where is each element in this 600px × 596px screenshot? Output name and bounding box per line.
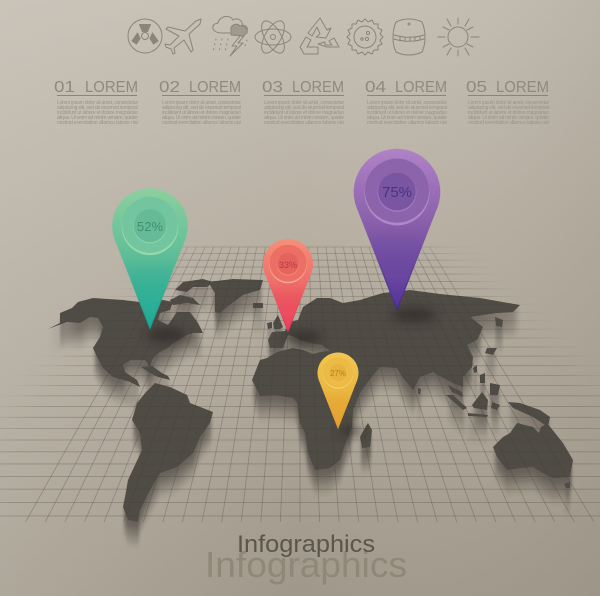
column 01: aliqua. Ut enim ad minim veniam, quister [57, 115, 138, 121]
column 02: incididunt ut labore et dolore magnaduo [162, 110, 241, 116]
column 04: 04 [365, 79, 386, 96]
pin: purple 75% [354, 149, 440, 311]
column 02: LOREM [189, 79, 241, 96]
pin: green 52%: 52% [137, 219, 163, 234]
pin: green 52% [112, 188, 188, 330]
column 04: adipiscing elit, sed do eiusmod temporal [367, 105, 447, 111]
column 05: LOREM [496, 79, 549, 96]
text columns [54, 79, 549, 126]
column 05: incididunt ut labore et dolore magnaduo [468, 110, 549, 116]
column 03: nostrud exercitation ullamco laboris nisi [264, 120, 344, 126]
column 04: LOREM [395, 79, 447, 96]
column 05: aliqua. Ut enim ad minim veniam, quister [468, 115, 549, 121]
column 05: adipiscing elit, sed do eiusmod temporal [468, 105, 549, 111]
column 02: Lorem ipsum dolor sit amet, consectetur [162, 100, 241, 106]
column 02: nostrud exercitation ullamco laboris nisi [162, 120, 241, 126]
column 01: LOREM [85, 79, 138, 96]
icon: airplane [165, 19, 201, 54]
column 03: aliqua. Ut enim ad minim veniam, quister [264, 115, 344, 121]
column 01: Lorem ipsum dolor sit amet, consectetur [57, 100, 138, 106]
title: Infographics [237, 531, 375, 558]
column 05: nostrud exercitation ullamco laboris nisi [468, 120, 549, 126]
column 01: nostrud exercitation ullamco laboris nisi [57, 120, 138, 126]
pin: red 33% [263, 239, 313, 333]
world map [0, 247, 600, 549]
column 03: Lorem ipsum dolor sit amet, consectetur [264, 100, 344, 106]
column 03: 03 [262, 79, 283, 96]
column 01 [54, 79, 138, 126]
land masses [48, 279, 573, 522]
column 05: 05 [466, 79, 487, 96]
column 04: aliqua. Ut enim ad minim veniam, quister [367, 115, 447, 121]
icon row [128, 16, 479, 57]
pin: purple 75%: 75% [382, 184, 412, 201]
column 05: Lorem ipsum dolor sit amet, consectetur [468, 100, 549, 106]
column 02: aliqua. Ut enim ad minim veniam, quister [162, 115, 241, 121]
column 04: Lorem ipsum dolor sit amet, consectetur [367, 100, 447, 106]
column 04 [365, 79, 447, 126]
column 05 [466, 79, 549, 126]
icon: barrel [393, 19, 425, 55]
column 01: 01 [54, 79, 75, 96]
column 01: incididunt ut labore et dolore magnaduo [57, 110, 138, 116]
icon: atom [255, 17, 291, 57]
column 04: nostrud exercitation ullamco laboris nisi [367, 120, 447, 126]
column 03 [262, 79, 344, 126]
column 01: adipiscing elit, sed do eiusmod temporal [57, 105, 138, 111]
perspective grid [0, 247, 600, 522]
column 02 [159, 79, 241, 126]
icon: gear [347, 19, 383, 55]
title reflection: Infographics [205, 544, 407, 585]
column 03: LOREM [292, 79, 344, 96]
icon: recycle [300, 18, 339, 54]
pin: yellow 27%: 27% [330, 369, 346, 378]
column 03: adipiscing elit, sed do eiusmod temporal [264, 105, 344, 111]
land extrusion shadow [48, 282, 573, 549]
pin ground shadows [146, 308, 436, 435]
column 03: incididunt ut labore et dolore magnaduo [264, 110, 344, 116]
column 02: 02 [159, 79, 180, 96]
pin: red 33%: 33% [279, 260, 297, 270]
icon: storm cloud [213, 16, 247, 56]
icon: sun [438, 18, 479, 56]
column 02: adipiscing elit, sed do eiusmod temporal [162, 105, 241, 111]
pin: yellow 27% [318, 352, 358, 429]
icon: radiation [128, 19, 162, 53]
column 04: incididunt ut labore et dolore magnaduo [367, 110, 447, 116]
